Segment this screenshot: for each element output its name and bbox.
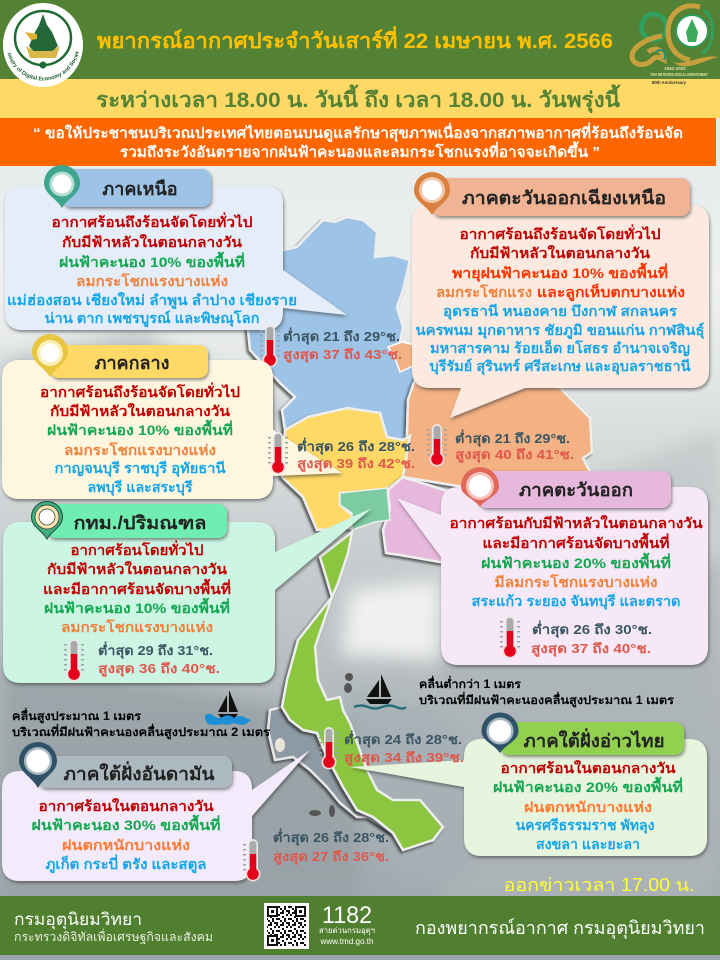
forecast text: กับมีฟ้าหลัวในตอนกลางวัน bbox=[470, 244, 650, 261]
icon: location pin bbox=[44, 165, 80, 208]
forecast text: อากาศร้อนโดยทั่วไป bbox=[70, 540, 204, 558]
forecast text: อากาศร้อนถึงร้อนจัดโดยทั่วไป bbox=[52, 212, 253, 230]
forecast text bbox=[493, 759, 683, 852]
forecast text bbox=[416, 224, 704, 375]
forecast text: บุรีรัมย์ สุรินทร์ ศรีสะเกษ และอุบลราชธานี bbox=[430, 358, 691, 375]
region: northeast bbox=[400, 370, 592, 488]
temperatures bbox=[98, 641, 220, 677]
forecast text: นครศรีธรรมราช พัทลุง bbox=[516, 817, 655, 834]
forecast text: มีลมกระโชกแรงบางแห่ง bbox=[494, 573, 658, 590]
icon: location pin bbox=[414, 172, 450, 215]
region: south Andaman coast bbox=[268, 707, 393, 833]
wave note: Andaman: บริเวณที่มีฝนฟ้าคะนองคลื่นสูงประมาณ 2 เมตร bbox=[12, 723, 271, 740]
forecast text: ภูเก็ต กระบี่ ตรัง และสตูล bbox=[46, 854, 206, 873]
department name bbox=[14, 910, 213, 944]
heading bbox=[50, 345, 208, 378]
forecast text: อากาศร้อนในตอนกลางวัน bbox=[38, 797, 214, 814]
forecast text: ฝนฟ้าคะนอง 10% ของพื้นที่ bbox=[47, 419, 233, 438]
issue time: ออกข่าวเวลา 17.00 น. bbox=[504, 875, 694, 895]
forecast text: ฝนตกหนักบางแห่ง bbox=[524, 799, 652, 815]
logo: 80th anniversary: 1942-2022 bbox=[664, 66, 686, 71]
temperatures: ต่ำสุด 24 ถึง 28°ช. bbox=[344, 730, 462, 748]
region: northeast small patch bbox=[388, 342, 415, 372]
forecast text: ฝนฟ้าคะนอง 10% ของพื้นที่ bbox=[59, 251, 245, 270]
region: Bangkok and vicinity bbox=[340, 488, 390, 530]
warning banner bbox=[0, 118, 716, 166]
forecast text: ลพบุรี และสระบุรี bbox=[88, 479, 193, 496]
icon: thermometer bbox=[268, 432, 288, 474]
forecast text: อากาศร้อนถึงร้อนจัดโดยทั่วไป bbox=[460, 224, 661, 242]
forecast text: กับมีฟ้าหลัวในตอนกลางวัน bbox=[62, 233, 242, 250]
department name: กระทรวงดิจิทัลเพื่อเศรษฐกิจและสังคม bbox=[14, 928, 213, 944]
temperatures bbox=[344, 730, 464, 766]
heading bbox=[432, 178, 690, 216]
temperatures bbox=[455, 429, 574, 463]
heading: ภาคตะวันออก bbox=[519, 480, 633, 500]
forecast text: ฝนฟ้าคะนอง 10% ของพื้นที่ bbox=[44, 597, 230, 616]
heading bbox=[62, 169, 211, 207]
panel: central bbox=[2, 334, 415, 499]
forecast text: แม่ฮ่องสอน เชียงใหม่ ลำพูน ลำปาง เชียงราย bbox=[7, 291, 297, 309]
icon: thermometer bbox=[500, 616, 520, 658]
callout bbox=[412, 205, 709, 418]
QR code bbox=[264, 903, 309, 949]
temperatures: ต่ำสุด 21 ถึง 29°ช. bbox=[283, 327, 400, 345]
heading: ภาคตะวันออกเฉียงเหนือ bbox=[462, 188, 666, 208]
title: พยากรณ์อากาศประจำวันเสาร์ที่ 22 เมษายน พ.ศ. 2566 bbox=[97, 25, 613, 53]
forecast text: ลมกระโชกแรงบางแห่ง bbox=[64, 441, 216, 458]
hotline: www.tmd.go.th bbox=[319, 937, 374, 946]
forecast text: และมีอากาศร้อนจัดบางพื้นที่ bbox=[482, 532, 670, 551]
wave note: Gulf: คลื่นต่ำกว่า 1 เมตร bbox=[419, 675, 522, 691]
heading bbox=[47, 504, 227, 538]
region: south Gulf coast bbox=[282, 532, 443, 850]
panel: south Andaman coast bbox=[2, 742, 389, 882]
footer band bbox=[0, 896, 720, 955]
heading bbox=[478, 471, 671, 508]
forecast text: สงขลา และยะลา bbox=[536, 836, 640, 852]
forecast text: และลูกเห็บตกบางแห่ง bbox=[537, 283, 685, 301]
header band bbox=[0, 0, 720, 79]
forecast text: นครพนม มุกดาหาร ชัยภูมิ ขอนแก่น กาฬสินธุ์ bbox=[416, 322, 704, 339]
forecast text: และมีอากาศร้อนจัดบางพื้นที่ bbox=[43, 578, 231, 597]
subtitle band bbox=[0, 79, 720, 118]
callout bbox=[5, 186, 347, 330]
map of Thailand bbox=[245, 217, 592, 850]
icon: location pin bbox=[32, 334, 68, 377]
temperatures: ต่ำสุด 29 ถึง 31°ช. bbox=[98, 641, 213, 659]
temperatures bbox=[283, 327, 402, 363]
panel: north bbox=[5, 165, 402, 368]
forecast text: ลมกระโชกแรง bbox=[436, 283, 532, 300]
forecast text: ลมกระโชกแรงบางแห่ง bbox=[61, 618, 213, 635]
forecast text: น่าน ตาก เพชรบูรณ์ และพิษณุโลก bbox=[44, 309, 260, 327]
region: north bbox=[245, 217, 420, 440]
forecast text: ฝนฟ้าคะนอง 20% ของพื้นที่ bbox=[493, 776, 683, 795]
department name: กรมอุตุนิยมวิทยา bbox=[14, 910, 142, 930]
forecast text: ฝนฟ้าคะนอง 30% ของพื้นที่ bbox=[32, 814, 220, 833]
temperatures: ต่ำสุด 26 ถึง 28°ช. bbox=[297, 437, 415, 455]
forecast text: กาญจนบุรี ราชบุรี อุทัยธานี bbox=[54, 460, 226, 477]
temperatures bbox=[297, 437, 415, 472]
hotline: 1182 bbox=[322, 902, 372, 929]
temperatures: สูงสุด 34 ถึง 39°ช. bbox=[344, 750, 464, 766]
icon: location pin bbox=[482, 712, 518, 753]
forecast text: ฝนฟ้าคะนอง 20% ของพื้นที่ bbox=[481, 552, 671, 571]
forecast text: อากาศร้อนกับมีฟ้าหลัวในตอนกลางวัน bbox=[450, 514, 703, 531]
callout bbox=[350, 739, 707, 856]
panel: northeast bbox=[412, 172, 709, 466]
icon: thermometer bbox=[64, 639, 84, 682]
temperatures: สูงสุด 27 ถึง 36°ช. bbox=[273, 849, 389, 865]
temperatures: สูงสุด 40 ถึง 41°ช. bbox=[455, 447, 574, 463]
panel: south Gulf coast bbox=[319, 712, 707, 856]
logo caption: 80th Anniversary bbox=[652, 80, 686, 85]
icon: location pin bbox=[461, 467, 499, 507]
panel: east bbox=[397, 467, 708, 665]
subtitle band: ระหว่างเวลา 18.00 น. วันนี้ ถึง เวลา 18.00 น. วันพรุ่งนี้ bbox=[96, 84, 621, 114]
islands bbox=[275, 673, 353, 817]
temperatures: สูงสุด 39 ถึง 42°ช. bbox=[297, 456, 415, 472]
wave note: Andaman bbox=[12, 707, 271, 740]
temperatures: สูงสุด 37 ถึง 40°ช. bbox=[531, 641, 651, 657]
temperatures: สูงสุด 36 ถึง 40°ช. bbox=[98, 661, 220, 677]
temperatures bbox=[531, 620, 652, 657]
callout bbox=[3, 508, 372, 683]
icon: thermometer bbox=[319, 727, 339, 770]
temperatures: ต่ำสุด 26 ถึง 28°ช. bbox=[273, 828, 389, 846]
temperatures: ต่ำสุด 21 ถึง 29°ช. bbox=[455, 429, 570, 447]
icon: thermometer bbox=[427, 424, 447, 466]
region: central bbox=[282, 408, 410, 530]
warning banner: รวมถึงระวังอันตรายจากฝนฟ้าคะนองและลมกระโชกแรงที่อาจจะเกิดขึ้น ” bbox=[120, 141, 600, 161]
icon: location pin bbox=[32, 502, 62, 539]
heading bbox=[38, 756, 232, 788]
forecast text: กับมีฟ้าหลัวในตอนกลางวัน bbox=[50, 402, 230, 419]
forecast text bbox=[32, 797, 220, 873]
icon: thermometer bbox=[243, 839, 263, 882]
heading: ภาคใต้ฝั่งอ่าวไทย bbox=[524, 728, 664, 751]
logo: 80th anniversary bbox=[632, 6, 719, 77]
heading: ภาคเหนือ bbox=[102, 179, 178, 199]
forecast text: สระแก้ว ระยอง จันทบุรี และตราด bbox=[472, 593, 680, 610]
callout bbox=[2, 360, 342, 499]
panel: Bangkok and vicinity bbox=[3, 502, 372, 683]
forecast text: ลมกระโชกแรงบางแห่ง bbox=[76, 272, 228, 289]
temperatures: ต่ำสุด 26 ถึง 30°ช. bbox=[532, 620, 652, 638]
icon: thermometer bbox=[260, 325, 280, 368]
forecast text: กับมีฟ้าหลัวในตอนกลางวัน bbox=[47, 560, 227, 577]
forecast text: มหาสารคาม ร้อยเอ็ด ยโสธร อำนาจเจริญ bbox=[430, 339, 690, 357]
callout bbox=[397, 487, 708, 665]
callout bbox=[2, 750, 310, 881]
forecast text: อากาศร้อนถึงร้อนจัดโดยทั่วไป bbox=[40, 382, 240, 400]
heading: ภาคใต้ฝั่งอันดามัน bbox=[64, 761, 215, 784]
icon: location pin bbox=[19, 742, 57, 788]
temperatures bbox=[273, 828, 389, 865]
forecast text: อากาศร้อนในตอนกลางวัน bbox=[500, 759, 676, 776]
forecast text bbox=[40, 382, 240, 496]
warning banner: “ ขอให้ประชาชนบริเวณประเทศไทยตอนบนดูแลรักษาสุขภาพเนื่องจากสภาพอากาศที่ร้อนถึงร้อนจัด bbox=[33, 122, 683, 142]
hotline bbox=[319, 902, 375, 946]
heading: กทม./ปริมณฑล bbox=[74, 513, 206, 533]
forecast text: ฝนตกหนักบางแห่ง bbox=[62, 837, 190, 853]
hotline: สายด่วนกรมอุตุฯ bbox=[319, 926, 375, 935]
heading: ภาคกลาง bbox=[95, 353, 169, 373]
icon: boat on calm sea bbox=[354, 674, 406, 708]
temperatures: สูงสุด 37 ถึง 43°ช. bbox=[283, 347, 402, 363]
icon: boat on rough sea bbox=[205, 690, 251, 725]
wave note: Gulf: บริเวณที่มีฝนฟ้าคะนองคลื่นสูงประมาณ 1 เมตร bbox=[419, 691, 675, 708]
wave note: Andaman: คลื่นสูงประมาณ 1 เมตร bbox=[12, 707, 142, 724]
forecast division: กองพยากรณ์อากาศ กรมอุตุนิยมวิทยา bbox=[415, 918, 705, 939]
region: east bbox=[383, 477, 470, 565]
forecast text bbox=[7, 212, 297, 327]
heading bbox=[500, 722, 684, 755]
wave note: Gulf bbox=[419, 675, 675, 708]
forecast text bbox=[43, 540, 231, 635]
forecast text: อุดรธานี หนองคาย บึงกาฬ สกลนคร bbox=[443, 303, 678, 320]
forecast text: พายุฝนฟ้าคะนอง 10% ของพื้นที่ bbox=[452, 262, 668, 282]
forecast text bbox=[450, 514, 703, 610]
